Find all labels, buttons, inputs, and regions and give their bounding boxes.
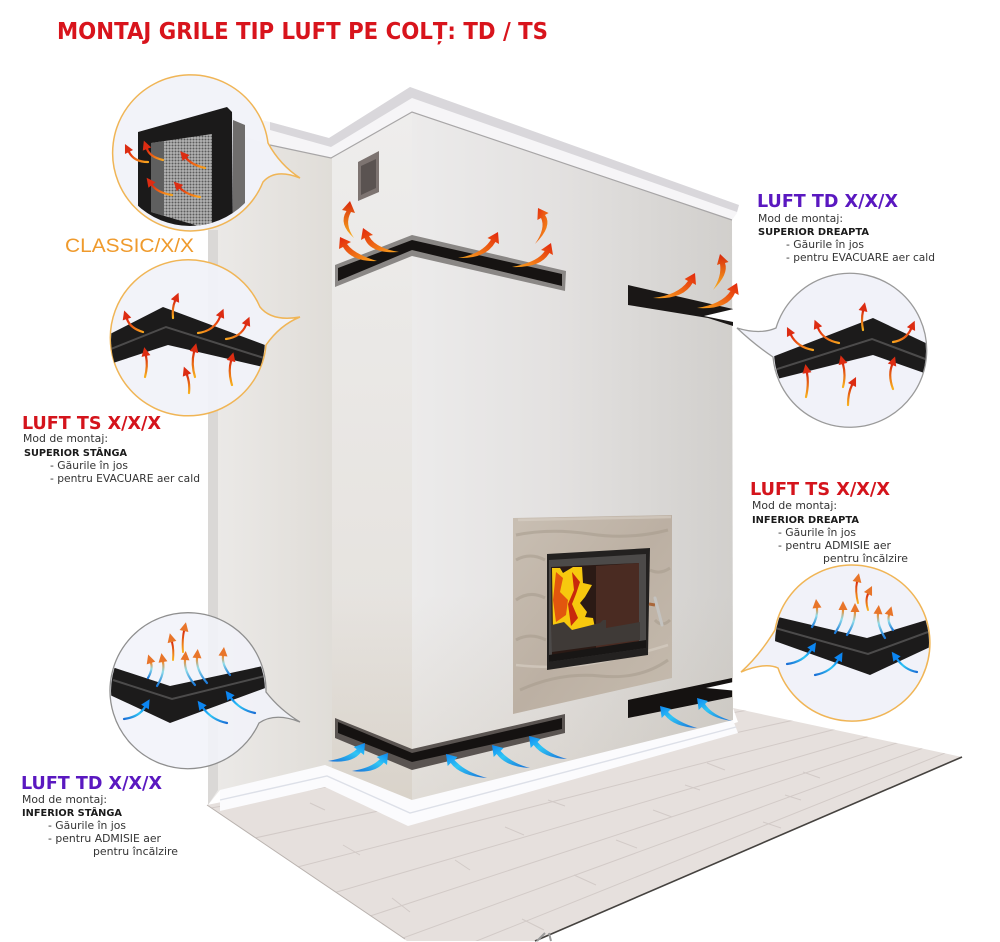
arrows (129, 149, 205, 197)
callout: lower left corner grille (110, 613, 300, 769)
text block: upper left (22, 413, 200, 485)
text block: upper right: SUPERIOR DREAPTA (758, 227, 869, 238)
arrows (787, 582, 917, 675)
arrows: cold air entering lower right grille (660, 698, 732, 728)
callout: classic grille (113, 75, 300, 235)
callout bubble (110, 260, 300, 416)
callout bubble (113, 75, 300, 231)
grille photo (138, 107, 245, 235)
text block: lower left: LUFT TD X/X/X (21, 773, 162, 794)
text block: upper left: - pentru EVACUARE aer cald (50, 473, 200, 485)
callout: upper left corner grille (110, 260, 300, 416)
text block: upper left: LUFT TS X/X/X (22, 413, 161, 434)
corner grille (772, 318, 930, 379)
fireplace (513, 515, 672, 714)
text block: lower right: - pentru ADMISIE aer (778, 540, 892, 552)
wall left face of chimney breast (332, 112, 412, 801)
stove handle (649, 598, 662, 625)
text block: lower right: Mod de montaj: (752, 500, 837, 512)
text block: lower right: LUFT TS X/X/X (750, 479, 890, 500)
arrows (791, 311, 911, 405)
text block: lower left: pentru încălzire (93, 846, 178, 858)
text block: lower right: INFERIOR DREAPTA (752, 515, 859, 526)
text block: lower left: - Găurile în jos (48, 820, 126, 832)
back left wall (208, 124, 332, 805)
lower corner grille slot (335, 714, 565, 770)
callout: upper right corner grille (737, 273, 930, 427)
text block: upper right: Mod de montaj: (758, 213, 843, 225)
callout bubble (737, 273, 927, 427)
lower right grille slot (628, 678, 738, 718)
upper corner grille slot (335, 235, 566, 291)
stove base (549, 640, 646, 662)
wall front face of chimney breast (332, 112, 733, 801)
wall vent (358, 151, 379, 201)
callout bubble (741, 565, 930, 721)
baseboard (220, 720, 738, 826)
arrows (127, 301, 246, 393)
arrows: hot air leaving upper corner grille (339, 201, 553, 267)
text block: upper left: Mod de montaj: (23, 433, 108, 445)
text block: lower left: - pentru ADMISIE aer (48, 833, 162, 845)
text block: lower right (750, 479, 908, 565)
callout bubble (110, 613, 300, 769)
text block: upper right: - pentru EVACUARE aer cald (786, 252, 935, 264)
arrows: cold air entering lower corner grille (328, 736, 567, 778)
stove door (547, 548, 650, 670)
text block: lower right: pentru încălzire (823, 553, 908, 565)
text block: lower left (21, 773, 178, 858)
logs and grate (552, 620, 640, 652)
title: MONTAJ GRILE TIP LUFT PE COLȚ: TD / TS (57, 19, 548, 45)
text block: lower right: - Găurile în jos (778, 527, 856, 539)
callout: lower right corner grille (741, 565, 930, 721)
stone surround (513, 515, 672, 714)
text block: lower left: Mod de montaj: (22, 794, 107, 806)
text block: upper left: - Găurile în jos (50, 460, 128, 472)
corner grille (110, 666, 268, 723)
label: classic grille: CLASSIC/X/X (65, 236, 194, 257)
corner grille (772, 617, 930, 675)
floor (206, 708, 962, 942)
text block: upper right (757, 191, 935, 264)
arrows (124, 631, 255, 723)
text block: upper right: - Găurile în jos (786, 239, 864, 251)
text block: upper left: SUPERIOR STÂNGA (24, 446, 127, 459)
arrows: hot air leaving upper right grille (653, 254, 739, 308)
flames (552, 567, 595, 635)
stove glass (551, 563, 639, 655)
text block: lower left: INFERIOR STÂNGA (22, 806, 122, 819)
upper right grille slot (628, 285, 738, 326)
ceiling cornice (243, 87, 739, 220)
corner grille (110, 307, 265, 367)
text block: upper right: LUFT TD X/X/X (757, 191, 898, 212)
